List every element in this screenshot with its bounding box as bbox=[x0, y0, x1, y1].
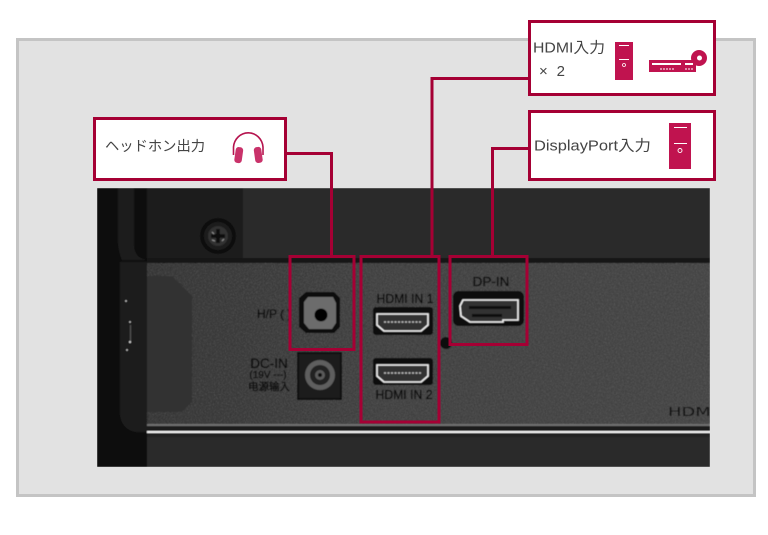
bezel inner strip bbox=[120, 262, 147, 432]
port panel bbox=[188, 262, 710, 424]
port label: DC-IN: DC-IN bbox=[250, 356, 288, 371]
port label: DC-IN: (19V ---) bbox=[249, 370, 287, 381]
panel recessed area bbox=[147, 276, 192, 412]
headphone label: ヘッドホン出力 bbox=[105, 138, 205, 155]
icon: headphones bbox=[234, 133, 263, 164]
icon: screw bbox=[200, 218, 236, 254]
upper dark block behind screw bbox=[147, 188, 243, 260]
port label: H/P: H/P ( ) bbox=[257, 307, 291, 321]
HDMI port 2 bbox=[373, 358, 433, 385]
HDMI port 1 bbox=[373, 307, 433, 335]
callout: headphone output bbox=[94, 118, 286, 180]
port label: DP-IN: DP-IN bbox=[472, 275, 510, 289]
callout: HDMI input bbox=[530, 22, 714, 94]
lower edge strips bbox=[146, 424, 710, 434]
bezel highlight bbox=[118, 188, 147, 260]
DisplayPort label: DisplayPort入力 bbox=[534, 138, 651, 154]
HDMI logo: HDMI bbox=[668, 405, 716, 419]
small round mark bbox=[440, 337, 452, 349]
photo: monitor rear ports bbox=[97, 188, 716, 467]
panel texture bbox=[147, 262, 710, 430]
headphone jack bbox=[299, 292, 340, 333]
callout: DisplayPort input bbox=[530, 112, 714, 180]
port label: HDMI IN 2: HDMI IN 2 bbox=[376, 388, 433, 402]
left bezel bbox=[97, 188, 147, 467]
bezel button dots bbox=[125, 300, 131, 351]
HDMI label: HDMI入力 bbox=[533, 40, 605, 56]
DisplayPort port bbox=[453, 291, 524, 326]
connector lines bbox=[285, 78, 530, 256]
panel top shadow bbox=[147, 258, 710, 263]
highlight: DisplayPort bbox=[450, 256, 527, 344]
icon: disc player bbox=[649, 50, 707, 72]
port label: DC-IN: 电源输入 bbox=[248, 380, 290, 393]
upper housing bbox=[243, 188, 710, 258]
DC power jack bbox=[297, 352, 342, 400]
highlight: headphone port bbox=[290, 256, 354, 350]
icon: computer tower bbox=[615, 42, 633, 80]
times two label: × 2 bbox=[539, 63, 565, 80]
port label: HDMI IN 1: HDMI IN 1 bbox=[376, 292, 434, 306]
icon: computer tower bbox=[669, 123, 691, 169]
port label: DC-IN bbox=[248, 358, 290, 392]
highlight: HDMI ports bbox=[361, 256, 439, 422]
